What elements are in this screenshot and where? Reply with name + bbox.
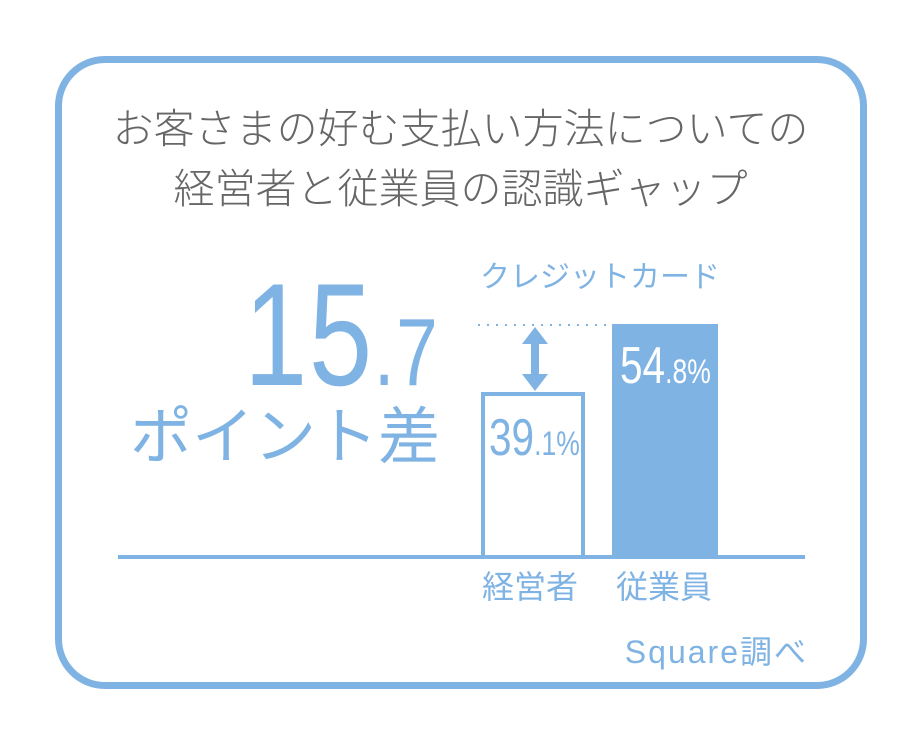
axis labels: 経営者: [482, 569, 578, 605]
bar: 従業員: 54.8%: [620, 336, 711, 394]
title: [113, 106, 808, 212]
bar: 経営者: 39.1%: [489, 408, 580, 466]
bar: 経営者: [483, 394, 583, 557]
frame: [55, 56, 867, 689]
axis labels: [482, 569, 712, 605]
arrow: [522, 327, 548, 391]
title: 経営者と従業員の認識ギャップ: [174, 166, 748, 212]
source: Square調べ: [625, 634, 808, 670]
bar: 従業員: [612, 324, 718, 557]
point difference label: ポイント差: [130, 403, 440, 472]
big number: 15.7: [244, 253, 439, 416]
title: お客さまの好む支払い方法についての: [113, 106, 808, 152]
axis labels: 従業員: [616, 569, 712, 605]
chart title: クレジットカード: [480, 261, 720, 294]
